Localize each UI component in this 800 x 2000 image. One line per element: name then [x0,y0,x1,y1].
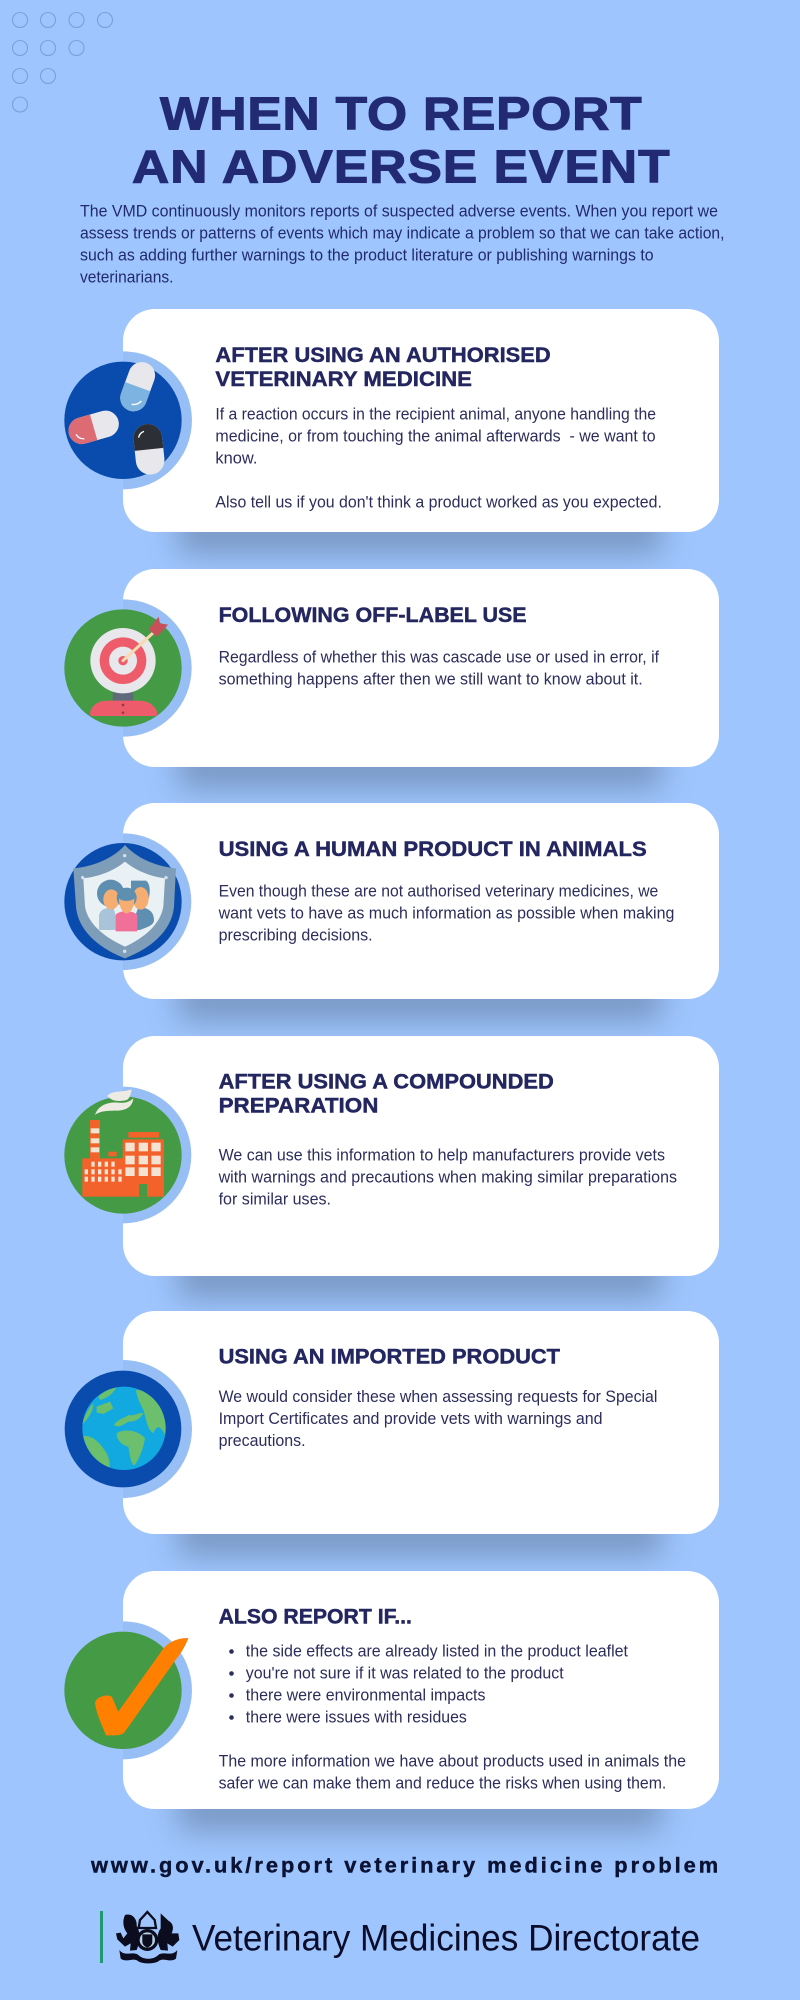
footer url: www.gov.uk/report veterinary medicine problem [90,1854,718,1878]
heading [215,343,551,391]
bullet list: there were issues with residues [246,1709,467,1727]
closing text: The more information we have about products used in animals the [219,1753,686,1771]
panel: using a human product in animals [64,803,719,1021]
body text: medicine, or from touching the animal afterwards - we want to [215,427,656,445]
card shadow [178,510,662,554]
heading: USING A HUMAN PRODUCT IN ANIMALS [219,837,647,861]
body text [219,1388,657,1450]
card background [123,309,719,532]
heading: USING AN IMPORTED PRODUCT [219,1344,560,1368]
heading: PREPARATION [219,1094,378,1118]
panel: also report if [64,1571,719,1831]
icon: shield with family [64,833,191,970]
organisation name: Veterinary Medicines Directorate [192,1918,700,1959]
icon: royal crest [116,1912,179,1963]
bullet list: there were environmental impacts [246,1687,486,1705]
body text: We would consider these when assessing requests for Special [219,1388,657,1406]
icon: capsules [64,351,192,489]
heading: ALSO REPORT IF... [219,1604,412,1628]
body text: with warnings and precautions when making similar preparations [218,1169,677,1187]
body text: Regardless of whether this was cascade use or used in error, if [219,649,659,667]
heading: VETERINARY MEDICINE [215,367,472,391]
body text: We can use this information to help manufacturers provide vets [219,1147,665,1165]
card background [123,1311,719,1534]
body text [215,405,662,511]
panel: using an imported product [65,1311,719,1556]
bullet list: you're not sure if it was related to the product [246,1665,564,1683]
closing text: safer we can make them and reduce the risks when using them. [219,1775,666,1793]
intro paragraph: assess trends or patterns of events which may indicate a problem so that we can take action, [80,225,724,243]
card background [123,803,719,999]
body text: want vets to have as much information as possible when making [218,905,674,923]
green rule [100,1911,103,1963]
closing text [219,1753,686,1793]
card background [123,1036,719,1276]
icon: factory [64,1087,191,1223]
icon: orange check mark [64,1621,192,1759]
body text: something happens after then we still want to know about it. [219,671,643,689]
body text: prescribing decisions. [219,927,373,945]
panel: after using a compounded preparation [64,1036,719,1298]
card shadow [178,1254,662,1298]
body text [218,1147,677,1209]
title: WHEN TO REPORT [160,89,642,140]
card shadow [178,977,662,1021]
body text: precautions. [219,1432,306,1450]
card shadow [178,1512,662,1556]
card shadow [178,745,662,789]
panel: following off-label use [64,569,719,789]
heading: FOLLOWING OFF-LABEL USE [219,603,527,627]
heading [219,1070,554,1118]
card background [123,1571,719,1809]
intro paragraph: such as adding further warnings to the product literature or publishing warnings to [80,247,654,265]
intro paragraph: veterinarians. [80,269,174,287]
body text: Also tell us if you don't think a product worked as you expected. [215,493,662,511]
icon: globe [65,1360,192,1498]
footer logo [100,1911,700,1963]
heading: AFTER USING A COMPOUNDED [219,1070,554,1094]
intro paragraph: The VMD continuously monitors reports of suspected adverse events. When you report we [80,203,718,221]
body text: know. [215,449,257,467]
bullet list: the side effects are already listed in the product leaflet [246,1643,628,1661]
body text [218,883,674,945]
body text: Import Certificates and provide vets with warnings and [219,1410,602,1428]
card background [123,569,719,767]
body text: If a reaction occurs in the recipient animal, anyone handling the [215,405,656,423]
heading: AFTER USING AN AUTHORISED [215,343,551,367]
title: AN ADVERSE EVENT [132,142,670,193]
body text: for similar uses. [219,1191,331,1209]
body text: Even though these are not authorised veterinary medicines, we [219,883,658,901]
icon: target and arrow [64,599,192,737]
bullet list [229,1643,628,1727]
decorative dot grid [12,12,112,112]
body text [219,649,659,689]
title [132,89,670,193]
intro paragraph [80,203,724,287]
card shadow [178,1787,662,1831]
panel: after using an authorised veterinary medicine [64,309,719,554]
